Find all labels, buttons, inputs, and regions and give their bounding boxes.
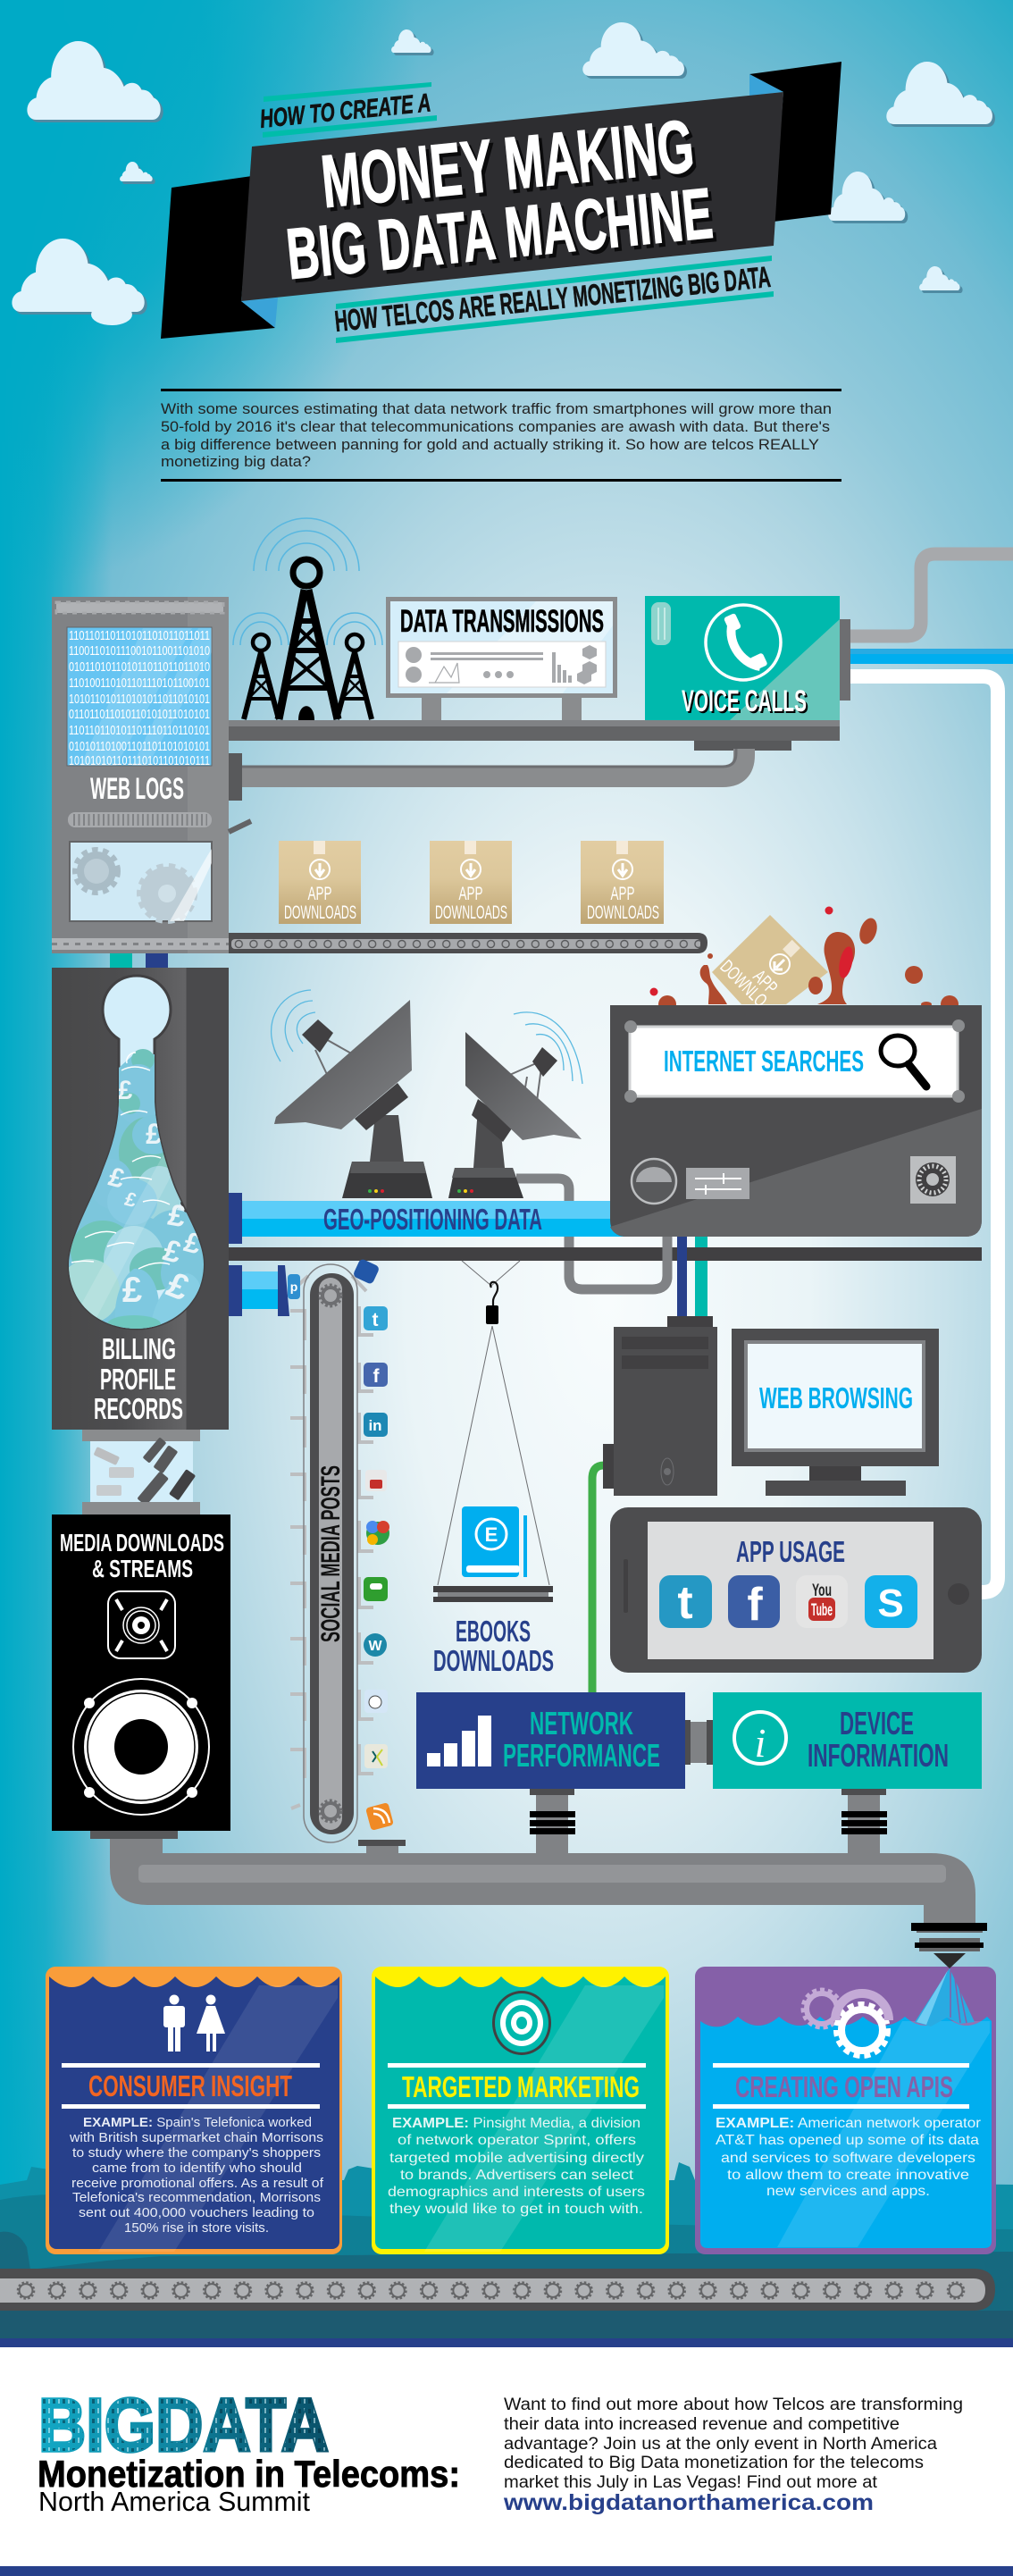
card text: with British supermarket chain Morrisons	[69, 2130, 323, 2145]
panel: internet searches machine: INTERNET SEARCHES	[664, 1045, 864, 1078]
panel: web logs machine	[52, 597, 251, 953]
icon: satellite dish left	[272, 990, 432, 1198]
card text: and services to software developers	[721, 2151, 975, 2166]
money bottle: £	[180, 1225, 205, 1261]
belt cleats	[290, 1276, 373, 1808]
footer text: advantage? Join us at the only event in North America	[504, 2435, 937, 2454]
card text: receive promotional offers. As a result of	[71, 2176, 324, 2191]
screen with binary code: 011011011010110101011010101	[69, 707, 210, 722]
ebook hanging on scale: EBOOKS	[456, 1615, 531, 1648]
ebook hanging on scale	[433, 1261, 554, 1677]
tilted app download box with red splash: DOWNLO	[716, 956, 771, 1011]
intro text block: a big difference between panning for gold and actually striking it. So how are telcos REALLY	[161, 436, 819, 453]
panel: voice calls	[645, 596, 840, 720]
card text	[388, 2116, 645, 2217]
panel: billing profile records machine	[52, 968, 229, 1430]
geo-positioning data pipe	[229, 1193, 628, 1244]
panel: billing profile records machine: RECORDS	[94, 1392, 183, 1425]
panel: voice calls: VOICE CALLS	[682, 684, 807, 718]
footer text: Want to find out more about how Telcos are transforming	[504, 2396, 963, 2414]
icon: cooling fan	[910, 1156, 956, 1204]
social icons on belt: f	[373, 1366, 381, 1387]
money bottle: £	[160, 1233, 185, 1271]
icon: phone handset	[706, 605, 781, 680]
small dishes connector pipe	[516, 1179, 667, 1289]
icon: info	[734, 1712, 786, 1766]
heading: money making big data machine	[283, 105, 719, 298]
social icons on belt: t	[372, 1310, 379, 1330]
card text: to study where the company's shoppers	[72, 2145, 321, 2161]
footer text: market this July in Las Vegas! Find out more at	[504, 2473, 878, 2492]
social icons on belt: W	[368, 1639, 382, 1654]
screen with binary code: 101010101101110101101010111	[69, 753, 210, 768]
short blue pipe	[229, 1265, 289, 1316]
shelf and pipe under voice calls	[225, 720, 840, 801]
phone: app usage: APP USAGE	[736, 1535, 845, 1568]
ebook hanging on scale: DOWNLOADS	[433, 1644, 554, 1677]
landscape silhouette	[0, 2162, 1013, 2341]
stems from panels to pipe	[530, 1789, 887, 1854]
card text: came from to identify who should	[92, 2161, 302, 2176]
panel: billing profile records machine: BILLING	[102, 1332, 176, 1365]
logo: big data: North America Summit	[38, 2486, 310, 2517]
footer text	[503, 2396, 963, 2515]
subtitle: how telcos are really monetizing	[333, 256, 774, 343]
card text: targeted mobile advertising directly	[389, 2151, 644, 2166]
panel: billing profile records machine: PROFILE	[100, 1363, 176, 1396]
card text: they would like to get in touch with.	[389, 2202, 643, 2217]
app download box 1	[279, 841, 361, 924]
teal cable	[695, 1237, 707, 1317]
footer	[0, 2338, 1013, 2576]
intro text block: monetizing big data?	[161, 453, 311, 470]
icon: gears	[803, 1990, 889, 2056]
cash tube between machines	[82, 1430, 200, 1515]
heading: money making big data machine: BIG DATA MACHINE	[287, 177, 719, 298]
screen with binary code: 110110110101101110110110101	[69, 723, 210, 738]
window with gears	[70, 842, 212, 921]
card text: new services and apps.	[766, 2184, 930, 2199]
social icons on belt	[288, 1258, 394, 1831]
panel: network performance: NETWORK	[530, 1705, 633, 1741]
hook and weight	[486, 1282, 498, 1324]
voice calls pipe connector	[840, 619, 850, 701]
social icons on belt: in	[368, 1417, 382, 1434]
card text: EXAMPLE: Spain's Telefonica worked	[83, 2115, 312, 2130]
intro text block: 50-fold by 2016 it's clear that telecommunications companies are awash with data. But there's	[161, 418, 830, 435]
card text: demographics and interests of users	[388, 2185, 645, 2200]
screen with binary code: 101011010110101011011010101	[69, 692, 210, 707]
footer text: www.bigdatanorthamerica.com	[503, 2490, 874, 2515]
card text: of network operator Sprint, offers	[398, 2133, 636, 2148]
card text: sent out 400,000 vouchers leading to	[79, 2205, 314, 2220]
money bottle: £	[105, 1162, 128, 1195]
icon: e-book: E	[485, 1523, 498, 1546]
bottom conveyor	[0, 2269, 995, 2311]
grey, blue and white data pipes on right	[850, 554, 1013, 1592]
screen with binary code: 010110101101011011011011010	[69, 659, 210, 675]
heading: how to create a: HOW TO CREATE A	[259, 88, 432, 134]
card text	[69, 2115, 324, 2236]
card text: Telefonica's recommendation, Morrisons	[72, 2190, 321, 2205]
heading: money making big data machine: BIG DATA MACHINE	[283, 173, 716, 294]
card: consumer insight: CONSUMER INSIGHT	[88, 2069, 292, 2102]
intro text block: With some sources estimating that data network traffic from smartphones will grow more than	[161, 400, 832, 417]
card text: EXAMPLE: Pinsight Media, a division	[392, 2116, 640, 2131]
panel: media downloads and streams speaker: & STREAMS	[92, 1555, 193, 1582]
icon: spray from nozzle	[915, 1968, 975, 2026]
money bottle	[68, 974, 205, 1330]
footer text: their data into increased revenue and competitive	[504, 2415, 900, 2434]
panel: data transmissions display	[388, 599, 615, 721]
card: creating open apis	[695, 1967, 996, 2254]
icon: man and woman	[163, 1994, 225, 2052]
app download box 1: APP	[307, 884, 332, 904]
logo: big data: BIGDATA	[38, 2383, 329, 2467]
main collector pipe	[90, 1831, 975, 1926]
gauge and sliders	[632, 1159, 749, 1204]
monitor: web browsing: WEB BROWSING	[759, 1381, 913, 1414]
screen with binary code	[67, 627, 212, 768]
icon: signal bars	[427, 1716, 491, 1766]
icon: e-book	[462, 1506, 527, 1577]
money bottle: £	[118, 1076, 133, 1105]
screen with binary code: 110110110110101101011011011	[69, 628, 210, 643]
icon: target	[492, 1991, 551, 2055]
money bottle: £	[161, 1264, 195, 1309]
panel: data transmissions display: DATA TRANSMISSIONS	[400, 604, 604, 639]
app download box 1: DOWNLOADS	[284, 902, 356, 923]
panel: media downloads and streams speaker	[52, 1515, 230, 1831]
app download box 2	[430, 841, 512, 924]
computer tower	[603, 1316, 717, 1496]
money bottle: £	[165, 1198, 188, 1234]
tilted app download box with red splash: APP	[749, 966, 782, 998]
icon: transmission towers with signals	[233, 518, 382, 720]
panel: web logs machine: WEB LOGS	[90, 772, 184, 806]
money bottle: £	[122, 1271, 142, 1310]
heading: money making big data machine: MONEY MAKING	[318, 105, 698, 223]
card text	[716, 2116, 982, 2199]
intro text block	[161, 389, 841, 482]
money bottle: £	[122, 1187, 139, 1212]
nozzle on main pipe	[911, 1923, 987, 1968]
social icons on belt: p	[290, 1280, 297, 1294]
panel: media downloads and streams speaker: MEDIA DOWNLOADS	[60, 1529, 224, 1557]
card text: AT&T has opened up some of its data	[716, 2133, 979, 2148]
heading: how to create a	[259, 82, 437, 138]
icon: twitter	[659, 1575, 712, 1629]
u-pipe over support bar	[569, 1237, 667, 1289]
icon: twitter: t	[677, 1577, 693, 1629]
icon: skype	[865, 1575, 917, 1628]
footer text: dedicated to Big Data monetization for the telecoms	[504, 2454, 924, 2472]
card: targeted marketing: TARGETED MARKETING	[402, 2070, 640, 2103]
icon: youtube: Tube	[811, 1601, 833, 1620]
money bottle: £	[146, 1118, 162, 1150]
gears	[320, 1285, 341, 1822]
monitor: web browsing	[732, 1329, 939, 1496]
horizontal support bar	[229, 1247, 982, 1261]
card: consumer insight	[46, 1967, 342, 2254]
icon: facebook	[728, 1575, 780, 1631]
title ribbon	[161, 62, 841, 343]
card text: to brands. Advertisers can select	[400, 2168, 634, 2183]
panel: network performance	[416, 1692, 685, 1789]
icon: woofer	[73, 1679, 209, 1815]
panel: device information	[713, 1692, 982, 1789]
card text: 150% rise in store visits.	[124, 2220, 269, 2236]
panel: voice calls: VOICE CALLS	[683, 686, 808, 720]
tilted app download box with red splash	[650, 906, 959, 1013]
app download box 2: APP	[459, 884, 482, 904]
app download box 2: DOWNLOADS	[435, 902, 507, 923]
icon: satellite dish right	[448, 1012, 582, 1198]
icon: youtube: You	[812, 1582, 832, 1600]
geo-positioning data pipe: GEO-POSITIONING DATA	[323, 1203, 542, 1236]
logo: big data	[38, 2383, 460, 2517]
connector pipes	[110, 953, 168, 969]
icon: info: i	[755, 1720, 766, 1766]
icon: facebook: f	[747, 1579, 763, 1631]
card: targeted marketing	[372, 1967, 669, 2254]
icon: skype: S	[877, 1582, 904, 1625]
clouds	[12, 22, 995, 325]
panel: device information: DEVICE	[840, 1705, 914, 1741]
card text: EXAMPLE: American network operator	[716, 2116, 982, 2131]
logo: big data: BIGDATA	[38, 2383, 329, 2467]
screen with binary code: 110011010111001011001101010	[69, 643, 210, 659]
heading: money making big data machine: MONEY MAKING	[322, 108, 701, 227]
panel: internet searches machine	[610, 1005, 982, 1237]
icon: tweeter	[108, 1591, 175, 1658]
green cable	[592, 1465, 604, 1692]
connector between panels	[685, 1720, 713, 1765]
social media conveyor belt	[288, 1258, 394, 1842]
social media conveyor belt: SOCIAL MEDIA POSTS	[316, 1465, 346, 1642]
app downloads conveyor	[229, 933, 707, 953]
app download box 3: APP	[611, 884, 634, 904]
icon: magnifier	[881, 1036, 926, 1087]
screen with binary code: 110100110101101110101100101	[69, 675, 210, 691]
logo: big data: Monetization in Telecoms:	[38, 2453, 460, 2495]
icon: youtube	[796, 1575, 848, 1628]
card text: to allow them to create innovative	[727, 2168, 969, 2183]
app download box 3	[581, 841, 664, 924]
panel: network performance: PERFORMANCE	[503, 1737, 660, 1774]
app download box 3: DOWNLOADS	[587, 902, 659, 923]
navy cable over bar	[677, 1237, 687, 1317]
phone: app usage	[610, 1507, 982, 1673]
screen with binary code: 010101101001101101101010101	[69, 739, 210, 754]
stem under conveyor	[358, 1840, 406, 1854]
